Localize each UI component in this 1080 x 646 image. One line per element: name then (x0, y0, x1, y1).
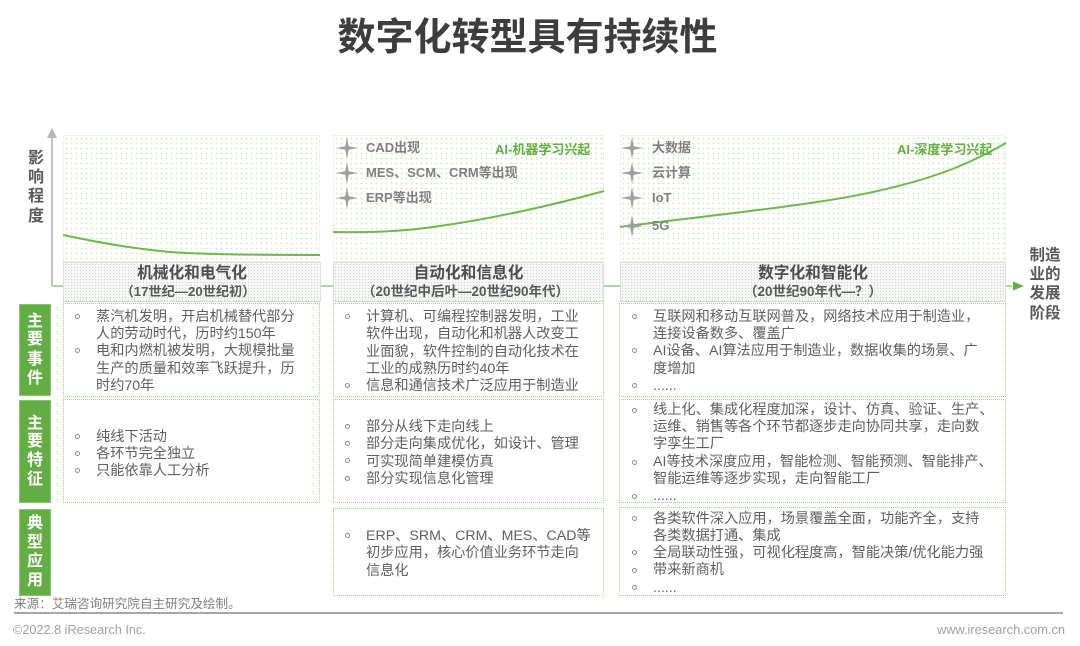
axis label: manufacturing stages: 阶段 (1029, 305, 1060, 322)
milestone labels: digitalization: IoT (652, 190, 672, 205)
row label: typical applications (19, 509, 51, 596)
panel: features automation: 部分从线下走向线上 (366, 419, 494, 435)
panel: events digitalization: ...... (653, 378, 677, 394)
panel: features automation: 部分实现信息化管理 (366, 471, 494, 487)
milestone labels: digitalization (652, 140, 691, 233)
panel: features digitalization: AI等技术深度应用，智能检测、智能预测、智能排产、 (653, 454, 993, 470)
panel: events mechanization: 蒸汽机发明，开启机械替代部分 (96, 309, 295, 325)
panel: events mechanization (63, 303, 320, 397)
panel: events digitalization: 互联网和移动互联网普及，网络技术应用于制造业， (653, 309, 979, 325)
panel: features automation: 部分走向集成优化，如设计、管理 (366, 436, 579, 452)
panel: features digitalization: ...... (653, 488, 677, 504)
panel: events digitalization: 连接设备数多、覆盖广 (653, 326, 795, 342)
panel: applications automation (333, 508, 604, 596)
panel: events automation: 业面貌，软件控制的自动化技术在 (366, 344, 579, 360)
row label: main features: 要 (27, 433, 43, 450)
panel: applications digitalization: 各类软件深入应用，场景覆盖全面，功能齐全，支持 (653, 511, 979, 527)
panel: events automation (333, 303, 604, 397)
icon group: stars for digitalization (621, 137, 643, 237)
axis label: manufacturing stages: 制造 (1029, 247, 1060, 264)
panel: features digitalization: 智能运维等逐步实现，走向智能工厂 (653, 471, 880, 487)
panel: features mechanization: 各环节完全独立 (96, 446, 195, 462)
panel: events digitalization: AI设备、AI算法应用于制造业，数据收集的场景、广 (653, 343, 978, 359)
panel: events mechanization: 生产的质量和效率飞跃提升，历 (96, 361, 295, 377)
panel: events mechanization: 时约70年 (96, 378, 154, 394)
milestone labels: digitalization: 云计算 (652, 165, 691, 180)
stage header: mechanization (63, 262, 321, 302)
panel: applications digitalization (619, 507, 1006, 596)
milestone labels: automation: ERP等出现 (366, 190, 432, 205)
axis label: impact (28, 150, 44, 225)
panel: features automation (333, 399, 604, 503)
panel: automation chart background (333, 135, 604, 262)
panel: features automation: 可实现简单建模仿真 (366, 454, 494, 470)
panel: features mechanization: 只能依靠人工分析 (96, 463, 210, 479)
panel: events digitalization: 度增加 (653, 361, 696, 377)
axis label: manufacturing stages: 发展 (1029, 285, 1060, 302)
source note: 来源：艾瑞咨询研究院自主研究及绘制。 (14, 597, 241, 611)
panel: events automation: 软件出现，自动化和机器人改变工 (366, 326, 579, 342)
footer: website: www.iresearch.com.cn (937, 622, 1065, 637)
stage header: automation: （20世纪中后叶—20世纪90年代） (362, 284, 569, 299)
panel: features digitalization (619, 399, 1006, 503)
row label: main events: 要 (27, 331, 43, 348)
panel: events digitalization (619, 303, 1006, 397)
milestone labels: automation (366, 140, 518, 205)
panel: applications automation: 初步应用，核心价值业务环节走向 (366, 545, 579, 561)
stage header: automation (333, 262, 604, 302)
panel: features digitalization: 运维、销售等各个环节都逐步走向协同共享，走向数 (653, 419, 979, 435)
stage header: digitalization: 数字化和智能化 (758, 265, 868, 282)
panel: events mechanization: 电和内燃机被发明，大规模批量 (96, 343, 295, 359)
panel: applications digitalization: 全局联动性强，可视化程度高，智能决策/优化能力强 (653, 545, 983, 561)
icon group: stars for automation (336, 137, 358, 208)
row label: typical applications: 型 (27, 534, 43, 551)
row label: typical applications: 用 (27, 572, 43, 589)
panel: features digitalization: 字孪生工厂 (653, 436, 724, 452)
milestone labels: automation: CAD出现 (366, 140, 420, 155)
row label: main events: 事 (27, 351, 43, 368)
milestone labels: digitalization: 5G (652, 218, 669, 233)
axis label: impact: 程 (28, 188, 44, 205)
milestone labels: automation: MES、SCM、CRM等出现 (366, 165, 518, 180)
footer: copyright: ©2022.8 iResearch Inc. (13, 623, 146, 637)
axis label: impact: 响 (28, 169, 44, 186)
stage header: mechanization: 机械化和电气化 (137, 265, 247, 282)
row label: main features: 征 (27, 471, 43, 488)
axis label: manufacturing stages (1029, 246, 1060, 322)
panel: features mechanization: 纯线下活动 (96, 429, 167, 445)
row label: main events (19, 304, 51, 396)
panel: applications digitalization: 各类数据打通、集成 (653, 528, 781, 544)
panel: events automation: 工业的成熟历时约40年 (366, 361, 509, 377)
panel: applications digitalization: 带来新商机 (653, 562, 724, 578)
panel: events mechanization: 人的劳动时代，历时约150年 (96, 326, 276, 342)
panel: events automation: 信息和通信技术广泛应用于制造业 (366, 378, 579, 394)
row label: main features (19, 400, 51, 503)
panel: digitalization chart background (620, 135, 1006, 262)
callout: AI deep learning: AI-深度学习兴起 (897, 142, 992, 157)
stage header: digitalization (620, 262, 1006, 302)
panel: features mechanization (63, 399, 320, 503)
panel: applications automation: ERP、SRM、CRM、MES、CAD等 (366, 528, 591, 544)
panel: applications automation: 信息化 (366, 563, 409, 579)
milestone labels: digitalization: 大数据 (652, 140, 691, 155)
panel: mechanization chart background (63, 135, 320, 262)
panel: applications digitalization: ...... (653, 580, 677, 596)
panel: features digitalization: 线上化、集成化程度加深，设计、仿真、验证、生产、 (653, 402, 994, 418)
axis label: impact: 度 (28, 208, 44, 225)
axis label: impact: 影 (28, 150, 44, 167)
stage header: mechanization: （17世纪—20世纪初） (121, 284, 255, 299)
stage header: digitalization: （20世纪90年代—？） (744, 284, 882, 299)
row label: main events: 件 (27, 370, 43, 387)
row label: main events: 主 (27, 313, 43, 330)
title: 数字化转型具有持续性 (337, 17, 718, 59)
stage header: automation: 自动化和信息化 (414, 265, 523, 282)
row label: typical applications: 应 (27, 553, 43, 570)
row label: typical applications: 典 (27, 515, 43, 532)
row label: main features: 主 (27, 415, 43, 432)
axis label: manufacturing stages: 业的 (1029, 266, 1060, 283)
callout: AI machine learning: AI-机器学习兴起 (495, 142, 590, 157)
row label: main features: 特 (27, 452, 43, 469)
panel: events automation: 计算机、可编程控制器发明，工业 (366, 309, 579, 325)
